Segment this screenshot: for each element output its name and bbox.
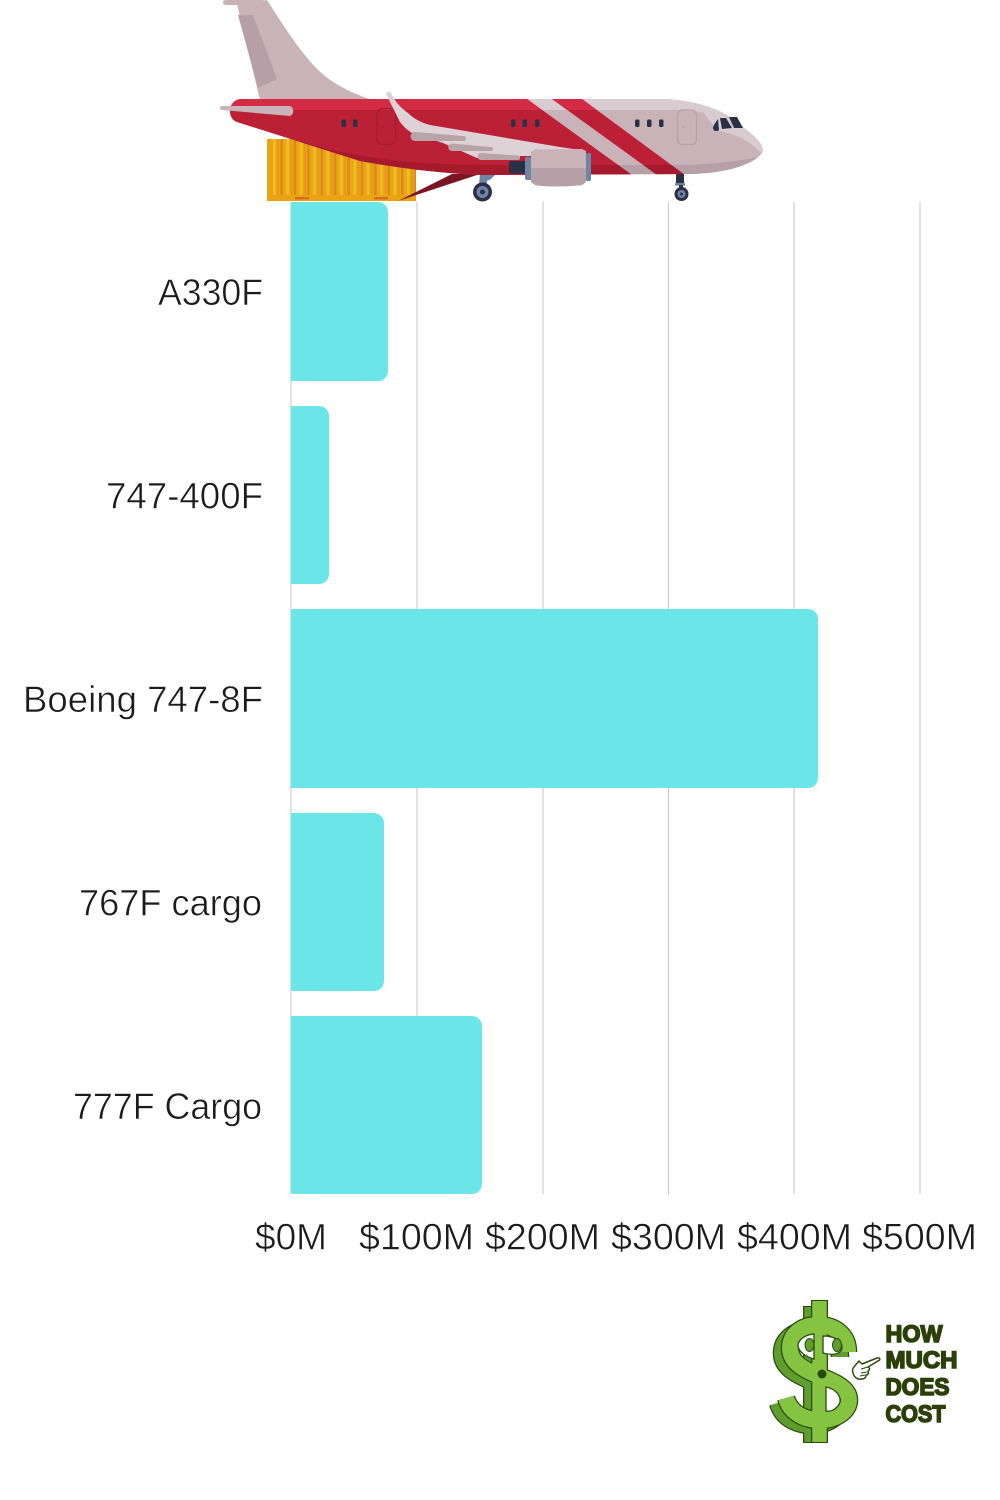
logo text: HOW [886,1321,943,1348]
bar: Boeing 747-8F [291,609,818,788]
icon: fuselage [230,99,763,175]
tick: $200M: $200M [485,1216,600,1258]
logo: How Much Does Cost [778,1300,958,1443]
icon: nose landing gear [674,174,688,201]
tick: $500M: $500M [862,1216,977,1258]
dollar face [811,1300,828,1443]
icon: main landing gear [473,174,496,202]
tick: $400M: $400M [737,1216,852,1258]
wing flap 3 [478,153,520,160]
label: 747-400F: 747-400F [106,476,263,516]
icon: pointing hand [853,1358,880,1379]
logo text: DOES [886,1374,950,1401]
label: 767F cargo: 767F cargo [79,882,262,924]
icon: cockpit windows [713,117,743,131]
icon: dollar mascot [778,1300,849,1443]
x axis labels [255,1216,977,1258]
icon: tailplane [220,106,293,116]
wing flap 2 [448,144,493,151]
icon: mascot eyes and mouth [798,1334,842,1411]
logo text: COST [886,1401,946,1428]
chart gridlines and axis [291,202,920,1194]
icon: passenger windows [342,120,664,127]
tick: $0M: $0M [255,1216,327,1258]
tick: $300M: $300M [611,1216,726,1258]
icon: engine [509,149,591,186]
bar: 767F cargo [291,813,384,991]
icon: wing [386,92,580,160]
label: A330F: A330F [158,272,263,313]
bar: 747-400F [291,406,329,584]
bar chart [291,202,818,1194]
category labels [23,272,263,1127]
tick: $100M: $100M [359,1216,474,1258]
logo text [886,1321,958,1428]
wing flap 1 [410,132,466,141]
label: Boeing 747-8F: Boeing 747-8F [23,679,263,720]
illustration: cargo plane and container [220,0,780,202]
dollar shadow [778,1306,841,1443]
bar: A330F [291,202,388,381]
icon: cabin doors [377,108,696,144]
bar: 777F Cargo [291,1016,482,1194]
icon: rear gear strut [398,174,480,201]
icon: cargo container [267,139,416,201]
logo text: MUCH [886,1347,958,1374]
icon: tail fin [223,0,372,100]
label: 777F Cargo: 777F Cargo [73,1086,262,1127]
